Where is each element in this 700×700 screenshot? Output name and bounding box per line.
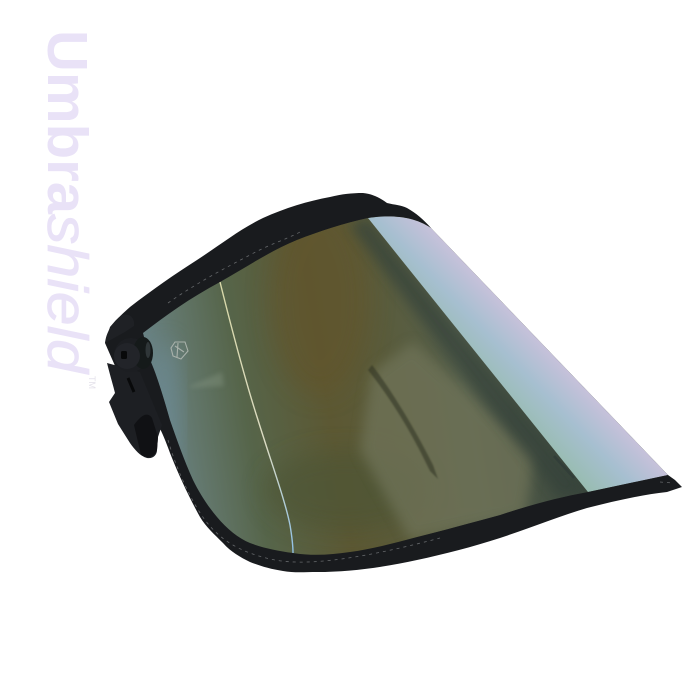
reflection: pale left patch [196,374,224,387]
trademark mark: TM [87,376,97,389]
wordmark: shield: shield [35,214,99,375]
reflection: shadow beside bright strip [350,218,570,490]
lens base gradient [143,216,668,555]
brand wordmark [35,30,99,389]
knob slot [121,351,127,359]
strip lower mark [554,456,571,476]
knob face [114,343,140,369]
reflection: blue left edge [152,350,184,454]
dark streak [368,365,438,479]
lower stitching [168,440,440,562]
lens logo emboss [171,342,188,359]
reflection: dark lower band [272,460,388,522]
tip stitching [660,482,674,483]
clip slit [128,378,134,392]
knob barrel [133,337,153,369]
hexagon logo [171,342,188,359]
visor binding band [105,193,682,572]
side clip [105,315,162,458]
clip shadow fold [134,415,158,457]
bright edge strip [368,216,668,492]
reflection: light olive patch [360,342,535,540]
knob outer [114,338,148,372]
wordmark: Umbra: Umbra [35,30,99,215]
clip shoulder [105,315,134,343]
hairline fold [220,282,293,553]
mirrored lens [143,216,668,555]
knob highlight [146,342,150,358]
band stitching [168,232,674,562]
clip arm [107,363,162,458]
product illustration [47,34,682,572]
reflection: warm brown centre [276,226,363,372]
top stitching [168,232,300,303]
hexagon logo inner [175,343,184,357]
lens reflections [151,205,588,540]
